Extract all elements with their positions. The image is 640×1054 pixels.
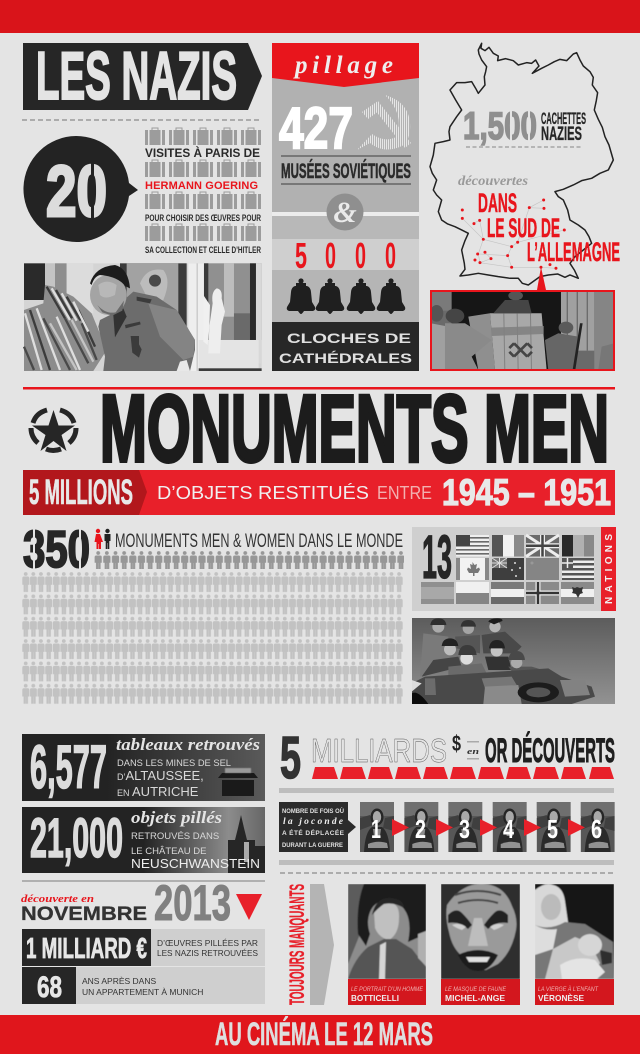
- heading: decouverte en novembre 2013: 2013: [154, 875, 231, 931]
- map outline: [430, 43, 613, 285]
- text: musees sovietiques: [281, 155, 411, 185]
- artwork: veronese: [535, 884, 614, 1005]
- stat: 6,577 tableaux: DANS LES MINES DE SEL: [117, 758, 231, 768]
- artwork: michel-ange: [441, 884, 520, 1005]
- stat: 21,000 objets: 21,000: [30, 806, 123, 869]
- callout: la joconde: A ÉTÉ DÉPLACÉE: [282, 828, 345, 837]
- label: cloches de cathedrales: CATHÉDRALES: [279, 350, 412, 366]
- arrow: gray: [310, 884, 334, 1005]
- text: decouvertes: découvertes: [458, 173, 528, 188]
- panel: 1 milliard: [22, 929, 265, 966]
- map: germany: [430, 43, 620, 285]
- callout: la joconde: [279, 802, 356, 852]
- flag: poland: [456, 582, 489, 604]
- text: dans le sud de l'allemagne: [478, 188, 620, 267]
- flag: france: [492, 535, 524, 556]
- mona lisa 4: 4: [503, 814, 514, 844]
- panel: 68 ans: 68: [37, 971, 62, 1004]
- icons: bells: [287, 278, 405, 314]
- label: cloches de cathedrales: CLOCHES DE: [287, 330, 411, 346]
- panel: 13 nations flags: [412, 523, 616, 611]
- text: dans le sud de l'allemagne: LE SUD DE: [487, 213, 560, 243]
- mona lisa 6: 6: [591, 814, 602, 844]
- artwork: botticelli: BOTTICELLI: [351, 993, 399, 1003]
- network lines: [462, 200, 564, 268]
- stat: 6,577 tableaux: [22, 733, 265, 801]
- panel: 1 milliard: D’ŒUVRES PILLÉES PAR: [157, 938, 258, 948]
- stat: 350: 350: [23, 521, 90, 579]
- text: visites a paris: SA COLLECTION ET CELLE D’HITLER: [145, 245, 261, 255]
- mona lisa 5: 5: [547, 814, 558, 844]
- banner: 5 millions objets restitues: [23, 470, 615, 515]
- stat: 21,000 objets: objets pillés: [131, 808, 222, 827]
- mona lisa 3: [448, 802, 482, 852]
- callout: la joconde: la joconde: [283, 817, 344, 827]
- photo: soldiers in jeep: [412, 618, 615, 704]
- banner: 5 millions objets restitues: ENTRE: [377, 483, 432, 503]
- mona lisa 4: [493, 802, 527, 852]
- stat: 21,000 objets: RETROUVÉS DANS: [131, 831, 219, 842]
- flag: austria: [561, 582, 594, 604]
- stat: 21,000 objets: [22, 806, 265, 873]
- stat: 1,500 cachettes: 1,500: [463, 105, 537, 148]
- stat: 5000: 0: [385, 235, 396, 276]
- icon: star emblem: [31, 410, 76, 451]
- icon: ampersand: &: [333, 196, 357, 229]
- heading: 5 milliards or decouverts: en: [467, 747, 480, 756]
- flag: netherlands: [491, 582, 524, 604]
- heading: 5 milliards or decouverts: [280, 725, 615, 791]
- icon: hammer and sickle: [357, 95, 411, 150]
- pictogram row dark: [94, 551, 404, 569]
- mona lisa 2: [404, 802, 438, 852]
- mona lisa 6: [581, 802, 615, 852]
- panel: 1 milliard: 1 MILLIARD €: [26, 933, 147, 965]
- artwork: michel-ange: MICHEL-ANGE: [445, 993, 505, 1003]
- artwork: veronese: VÉRONÈSE: [538, 993, 584, 1003]
- stat: 6,577 tableaux: EN AUTRICHE: [117, 784, 199, 799]
- mona lisa 5: [537, 802, 571, 852]
- artwork: michel-ange: LE MASQUE DE FAUNE: [445, 986, 507, 993]
- photo: goering with paintings: [24, 263, 262, 371]
- text: visites a paris: POUR CHOISIR DES ŒUVRES POUR: [145, 213, 261, 223]
- flag: ussr: [526, 558, 559, 580]
- stat: 427: 427: [279, 96, 353, 161]
- photo: crate with soldiers: [430, 291, 614, 370]
- text: dans le sud de l'allemagne: DANS: [478, 188, 517, 218]
- flag: new zealand: [492, 558, 524, 580]
- flag: norway: [526, 582, 559, 604]
- rule above main title: [23, 387, 615, 390]
- icons: gold bars: [312, 767, 614, 779]
- heading: decouverte en novembre 2013: [21, 875, 262, 931]
- arrows between paintings: [392, 819, 585, 836]
- mona lisa 1: 1: [371, 814, 381, 844]
- panel: 68 ans: ANS APRÈS DANS: [82, 976, 156, 986]
- icon: woman: [94, 529, 103, 549]
- panel: pillage: [272, 43, 419, 371]
- mona lisa 2: 2: [415, 814, 426, 844]
- mona lisa 3: 3: [459, 814, 470, 844]
- text: visites a paris: VISITES À PARIS DE: [145, 147, 260, 160]
- panel: 68 ans: UN APPARTEMENT À MUNICH: [82, 987, 203, 997]
- banner: 5 millions objets restitues: D’OBJETS RESTITUÉS: [157, 482, 369, 503]
- top red band: [0, 0, 640, 33]
- pillage header: pillage: [293, 52, 393, 79]
- callout: 20 visits: [23, 136, 138, 242]
- panel: 1 milliard: LES NAZIS RETROUVÉES: [157, 948, 258, 958]
- icon rows: suitcases: [145, 127, 261, 241]
- map dots: [461, 198, 566, 270]
- text: TOUJOURS MANQUANTS: [286, 884, 309, 1005]
- banner: les nazis: [23, 38, 262, 114]
- panel: 13 nations flags: 13: [422, 523, 452, 591]
- heading: MONUMENTS MEN & WOMEN DANS LE MONDE: [115, 530, 403, 552]
- dashed divider: [22, 119, 262, 121]
- flag: greece: [562, 558, 594, 580]
- callout: la joconde: DURANT LA GUERRE: [282, 842, 344, 849]
- heading: decouverte en novembre 2013: découverte en: [21, 894, 94, 905]
- icon: ampersand: [326, 194, 364, 230]
- artwork: veronese: LA VIERGE À L’ENFANT: [538, 984, 599, 993]
- heading: 5 milliards or decouverts: $: [452, 731, 461, 756]
- flag: uk: [526, 535, 559, 556]
- footer band: AU CINÉMA LE 12 MARS: [215, 1016, 433, 1052]
- banner: les nazis: LES NAZIS: [36, 38, 237, 114]
- stat: 5000: 0: [355, 235, 366, 276]
- text: visites a paris: [145, 147, 261, 255]
- label: nations: NATIONS: [604, 534, 615, 604]
- stat: 21,000 objets: LE CHÂTEAU DE: [131, 846, 206, 857]
- flag: belgium: [562, 535, 594, 556]
- stat: 1,500 cachettes: NAZIES: [541, 124, 582, 145]
- banner: 5 millions objets restitues: 5 MILLIONS: [29, 473, 133, 512]
- callout: 20 visits: 20: [46, 152, 107, 232]
- footer band: [0, 1015, 640, 1054]
- stat: 21,000 objets: NEUSCHWANSTEIN: [131, 856, 260, 871]
- pictogram rows light: [22, 572, 403, 705]
- pillage header: [272, 43, 419, 87]
- stat: 5000: 0: [325, 235, 336, 276]
- flag: spain: [421, 582, 454, 604]
- heading: decouverte en novembre 2013: NOVEMBRE: [21, 904, 147, 925]
- sequence: mona lisa 1 to 6: [360, 802, 615, 852]
- icon: man: [104, 529, 110, 549]
- artwork: botticelli: LE PORTRAIT D’UN HOMME: [351, 986, 424, 993]
- section: 350 monuments men and women: [22, 521, 404, 705]
- callout: la joconde: NOMBRE DE FOIS OÙ: [282, 806, 344, 815]
- stat: 6,577 tableaux: tableaux retrouvés: [116, 735, 260, 754]
- mona lisa 1: [360, 802, 394, 852]
- stat: 6,577 tableaux: D’ALTAUSSEE,: [117, 768, 204, 783]
- label: cloches de cathedrales: [272, 322, 419, 371]
- flag: usa: [456, 535, 489, 556]
- panel: 68 ans: [22, 967, 265, 1004]
- text: musees sovietiques: MUSÉES SOVIÉTIQUES: [281, 160, 411, 183]
- label: nations: [601, 527, 616, 611]
- flag: canada: [456, 558, 489, 580]
- heading: 5 milliards or decouverts: 5: [280, 725, 301, 791]
- arrow: map to photo: [537, 267, 546, 290]
- stat: 5000: [295, 235, 396, 276]
- stat: 6,577 tableaux: 6,577: [30, 733, 107, 801]
- icon: red triangle: [236, 894, 262, 920]
- heading: 5 milliards or decouverts: MILLIARDS: [311, 732, 447, 769]
- stat: 5000: 5: [295, 235, 307, 276]
- artwork: botticelli: [348, 884, 426, 1005]
- text: visites a paris: HERMANN GOERING: [145, 180, 258, 192]
